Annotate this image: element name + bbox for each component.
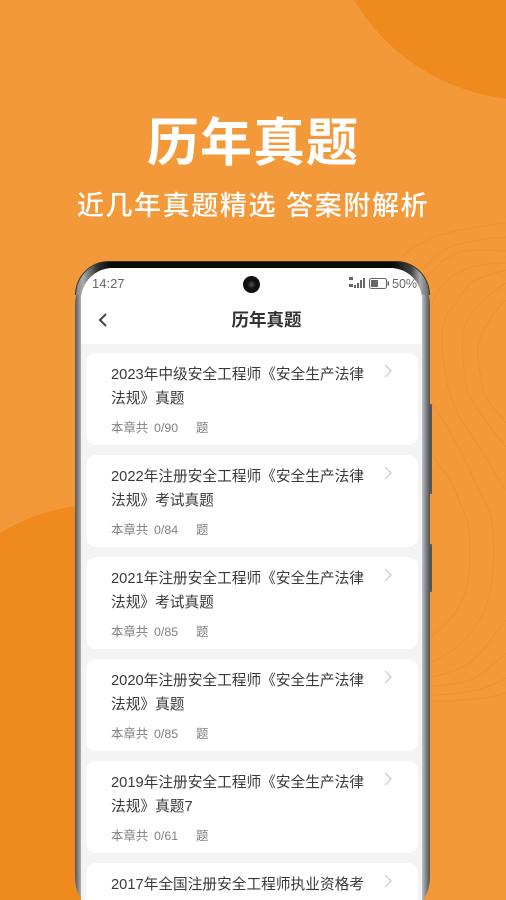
- app header: [81, 268, 422, 344]
- card 2023: 题: [196, 421, 208, 435]
- card 2022: 题: [196, 523, 208, 537]
- phone frame: [75, 261, 430, 900]
- card 2020: 2020年注册安全工程师《安全生产法律法规》真题: [111, 673, 364, 713]
- card 2023: 本章共: [111, 421, 148, 435]
- subtitle: 近几年真题精选 答案附解析: [77, 191, 429, 221]
- card 2019: [86, 761, 418, 853]
- card 2023: 2023年中级安全工程师《安全生产法律法规》真题: [111, 367, 364, 407]
- card 2019: 0/61: [154, 829, 178, 843]
- card 2023: 0/90: [154, 421, 178, 435]
- card 2017: 2017年全国注册安全工程师执业资格考: [111, 877, 364, 893]
- status icons: [349, 277, 417, 291]
- card 2021: 题: [196, 625, 208, 639]
- power button: [429, 404, 432, 494]
- phone mockup: [75, 261, 432, 900]
- card 2020: 0/85: [154, 727, 178, 741]
- screen title: 历年真题: [232, 310, 302, 330]
- card 2021: 0/85: [154, 625, 178, 639]
- title: 历年真题: [147, 115, 359, 173]
- card 2021: [86, 557, 418, 649]
- card 2017: [86, 863, 418, 900]
- status icons: 50%: [392, 277, 417, 291]
- card 2020: [86, 659, 418, 751]
- card 2022: [86, 455, 418, 547]
- card 2021: 2021年注册安全工程师《安全生产法律法规》考试真题: [111, 571, 364, 611]
- card 2019: 本章共: [111, 829, 148, 843]
- card 2022: 0/84: [154, 523, 178, 537]
- card 2023: [86, 353, 418, 445]
- card 2022: 本章共: [111, 523, 148, 537]
- volume button: [429, 544, 432, 592]
- status time: 14:27: [92, 276, 125, 291]
- camera: [243, 276, 260, 293]
- phone top bezel: [75, 261, 430, 295]
- back chevron: [98, 313, 107, 327]
- card 2019: 2019年注册安全工程师《安全生产法律法规》真题7: [111, 775, 364, 815]
- card 2020: 本章共: [111, 727, 148, 741]
- card 2020: 题: [196, 727, 208, 741]
- card 2021: 本章共: [111, 625, 148, 639]
- phone screen: [81, 268, 422, 900]
- card 2019: 题: [196, 829, 208, 843]
- card 2022: 2022年注册安全工程师《安全生产法律法规》考试真题: [111, 469, 364, 509]
